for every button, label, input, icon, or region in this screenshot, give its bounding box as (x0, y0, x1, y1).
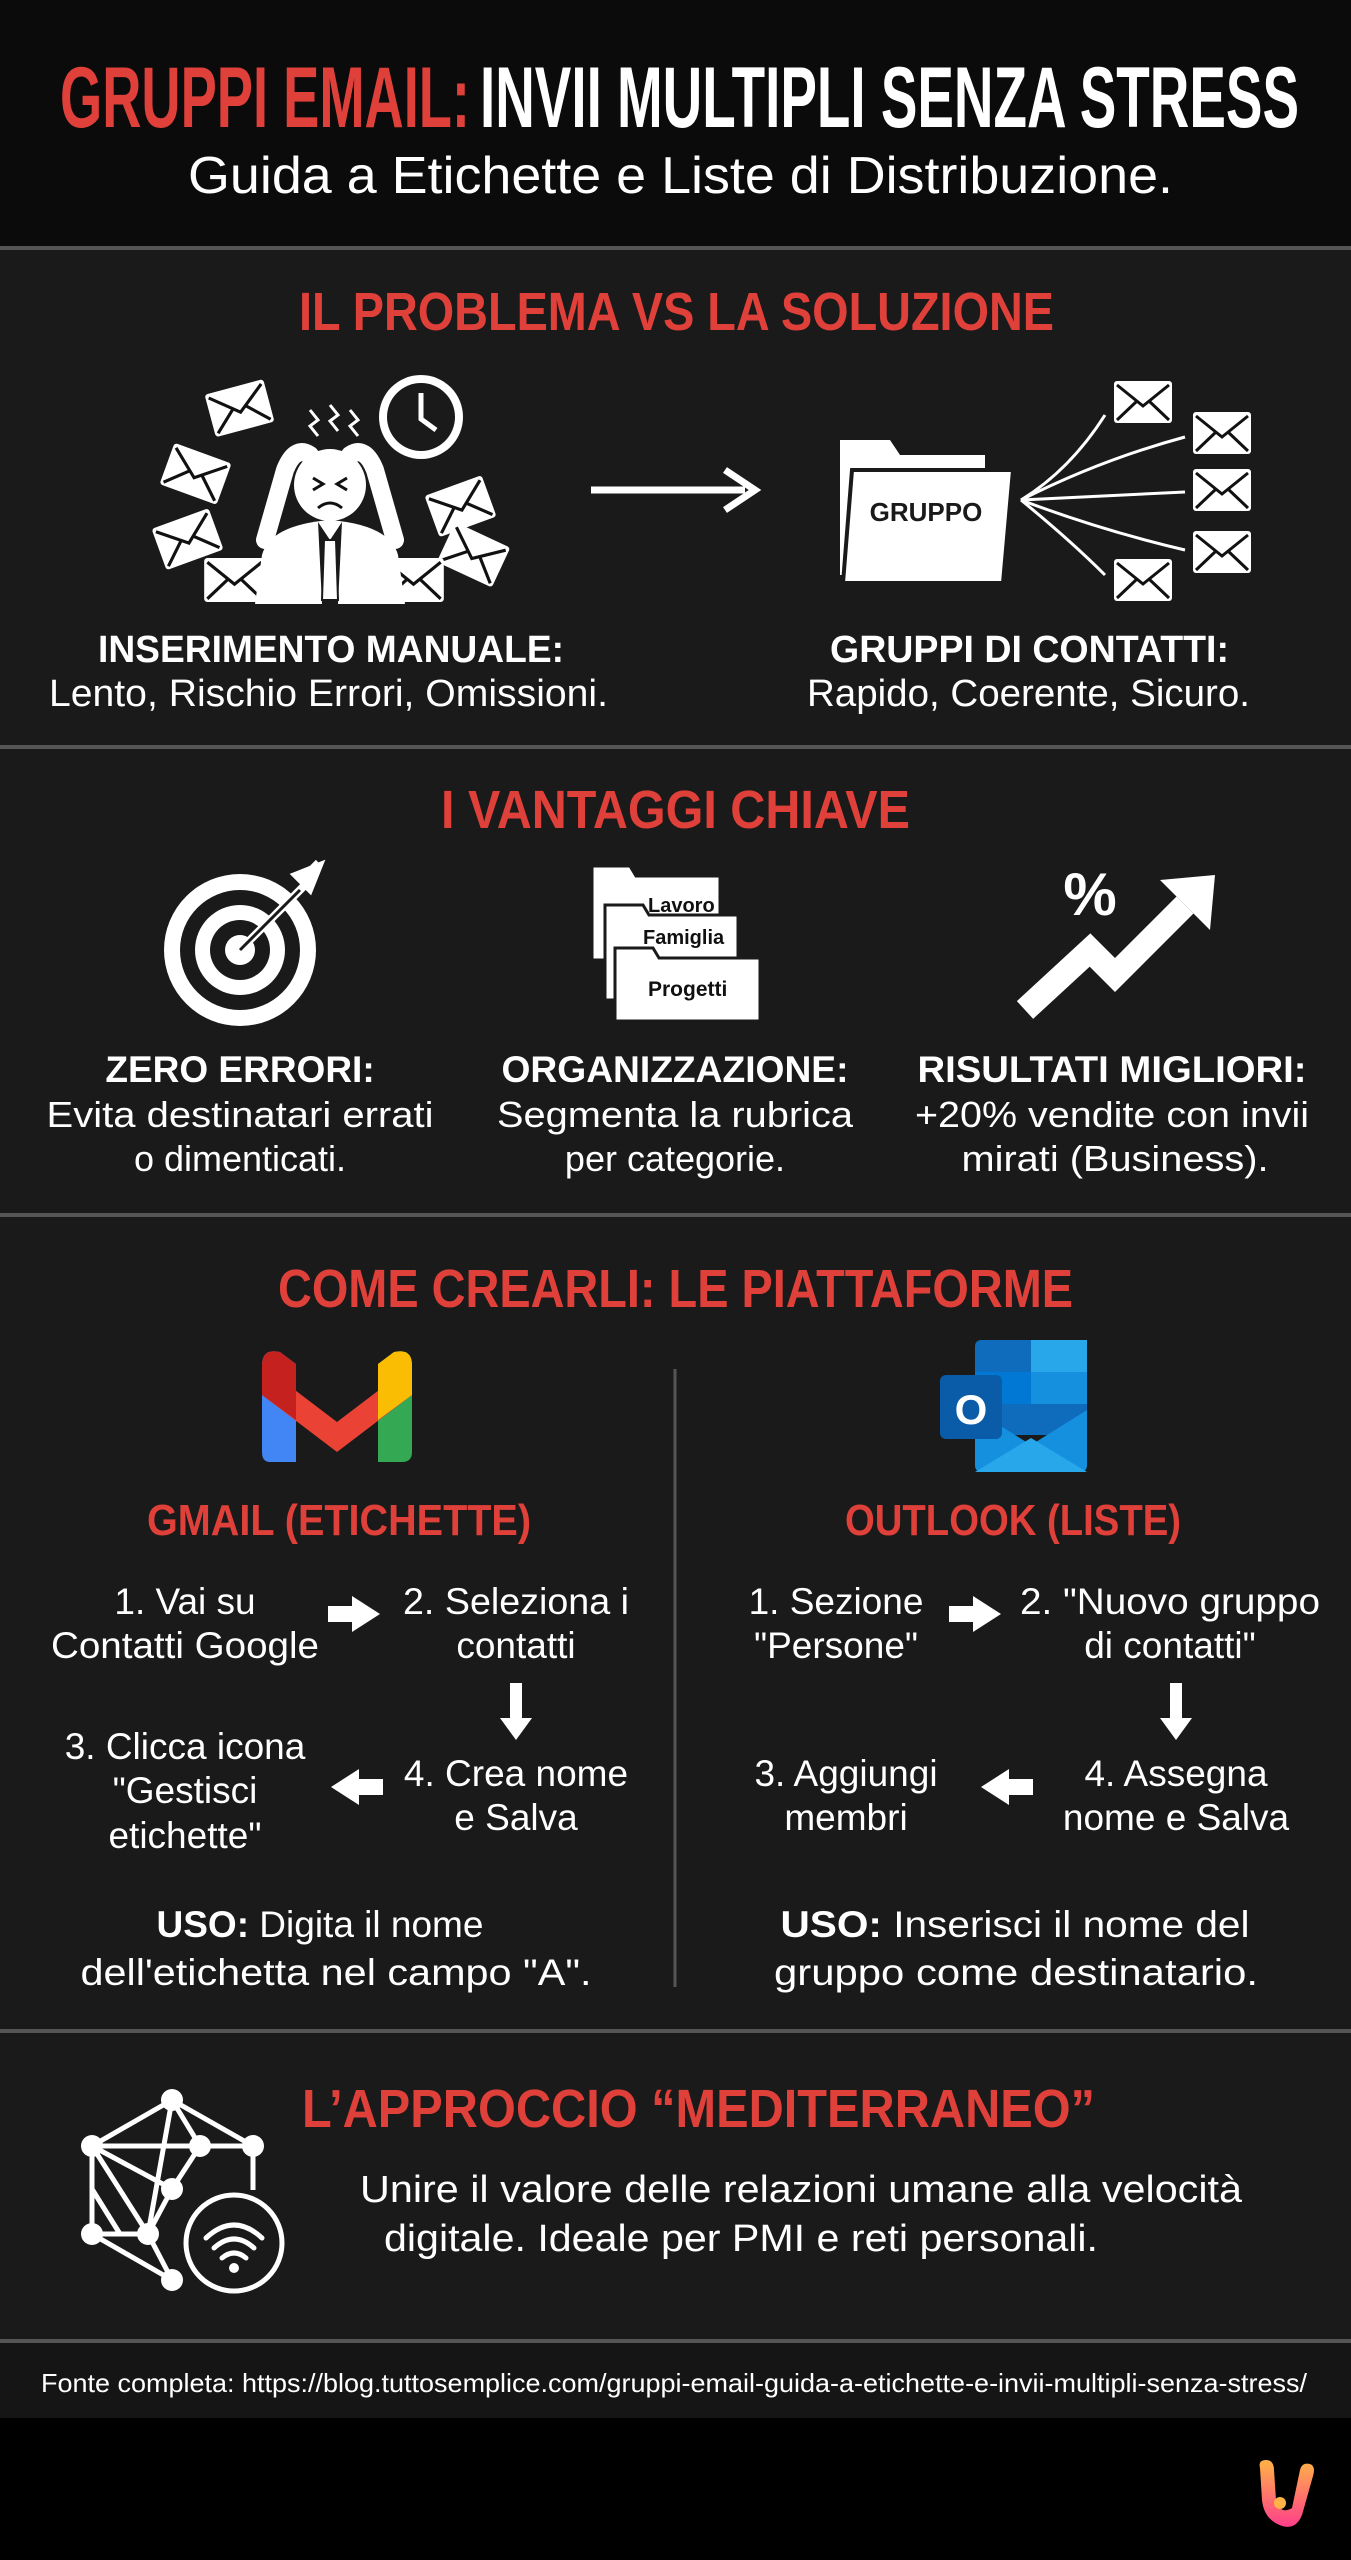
outlook steps: 4. Assegna (1084, 1753, 1268, 1794)
panel: platforms (51, 1259, 1320, 1993)
arrow: problem to solution (591, 470, 755, 510)
heading: platforms: COME CREARLI: LE PIATTAFORME (278, 1259, 1073, 1319)
title: GRUPPI EMAIL: (60, 50, 470, 146)
outlook steps: nome e Salva (1063, 1797, 1290, 1838)
gmail steps: 3. Clicca icona (65, 1726, 306, 1767)
subheading: gmail: GMAIL (ETICHETTE) (147, 1496, 531, 1545)
text: contact groups (807, 629, 1250, 715)
usage: outlook: USO: Inserisci il nome del (780, 1904, 1250, 1945)
gmail steps: Contatti Google (51, 1625, 319, 1666)
text: mediterranean description: digitale. Ideale per PMI e reti personali. (384, 2218, 1098, 2260)
text: mediterranean description: Unire il valore delle relazioni umane alla velocità (360, 2169, 1243, 2211)
icon: network with wifi (81, 2089, 282, 2291)
icon: folders stack: Progetti (648, 978, 727, 1001)
icon: folder GRUPPO with fan-out (840, 381, 1251, 601)
text: mediterranean description (360, 2169, 1243, 2260)
outlook steps: 2. "Nuovo gruppo (1020, 1581, 1320, 1622)
panel: problem vs solution (49, 282, 1251, 715)
outlook steps: di contatti" (1084, 1625, 1256, 1666)
arrows: outlook flow (949, 1596, 1192, 1805)
text: organization: Segmenta la rubrica (497, 1094, 854, 1135)
icon: folders stack: Famiglia (643, 927, 725, 949)
text: manual entry (49, 629, 608, 715)
text: zero errors: ZERO ERRORI: (105, 1049, 375, 1090)
panel: mediterranean approach (81, 2079, 1243, 2291)
heading: key advantages: I VANTAGGI CHIAVE (441, 780, 910, 840)
text: zero errors (46, 1049, 434, 1179)
subheading: outlook: OUTLOOK (LISTE) (845, 1496, 1181, 1545)
arrows: gmail flow (328, 1596, 532, 1805)
text: zero errors: Evita destinatari errati (46, 1094, 434, 1135)
outlook steps: 3. Aggiungi (754, 1753, 938, 1794)
gmail steps: 1. Vai su (114, 1581, 256, 1622)
icon: outlook logo: O (955, 1386, 987, 1433)
usage: outlook: gruppo come destinatario. (774, 1952, 1258, 1993)
outlook steps: membri (784, 1797, 908, 1838)
icon: outlook logo (940, 1340, 1087, 1472)
gmail steps: contatti (456, 1625, 576, 1666)
text: contact groups: Rapido, Coerente, Sicuro. (807, 673, 1250, 715)
icon: stressed man with emails (152, 375, 510, 604)
text: organization: ORGANIZZAZIONE: (502, 1049, 848, 1090)
text: better results: +20% vendite con invii (915, 1094, 1309, 1135)
outlook steps: 1. Sezione (749, 1581, 923, 1622)
panel: key advantages (46, 780, 1309, 1179)
heading: mediterranean approach: L’APPROCCIO “MEDITERRANEO” (302, 2079, 1095, 2139)
heading: problem vs solution: IL PROBLEMA VS LA SOLUZIONE (299, 282, 1054, 342)
text: organization: per categorie. (565, 1138, 785, 1179)
subtitle: Guida a Etichette e Liste di Distribuzione. (188, 147, 1173, 205)
usage: gmail: USO: Digita il nome (157, 1904, 483, 1945)
icon: folders stack (592, 866, 760, 1021)
text: better results: mirati (Business). (962, 1138, 1268, 1179)
gmail steps: e Salva (454, 1797, 578, 1838)
gmail steps: 4. Crea nome (404, 1753, 628, 1794)
icon: folders stack: Lavoro (648, 895, 715, 917)
usage: outlook (774, 1904, 1258, 1993)
text: contact groups: GRUPPI DI CONTATTI: (830, 629, 1229, 671)
text: better results: RISULTATI MIGLIORI: (918, 1049, 1306, 1090)
icon: growth chart (1025, 861, 1215, 1010)
footer: source: Fonte completa: https://blog.tuttosemplice.com/gruppi-email-guida-a-etichette-e-invii-multipli-senza-stress/ (41, 2368, 1308, 2398)
outlook steps (749, 1581, 1320, 1838)
text: manual entry: Lento, Rischio Errori, Omissioni. (49, 673, 608, 715)
gmail steps: 2. Seleziona i (403, 1581, 629, 1622)
icon: target (164, 862, 320, 1026)
outlook steps: "Persone" (754, 1625, 918, 1666)
title (60, 50, 1299, 146)
icon: growth chart: % (1063, 861, 1117, 928)
icon: folder GRUPPO with fan-out: GRUPPO (870, 497, 982, 527)
text: organization (497, 1049, 854, 1179)
text: better results (915, 1049, 1309, 1179)
icon: gmail logo (262, 1351, 412, 1462)
gmail steps: etichette" (108, 1815, 262, 1856)
text: zero errors: o dimenticati. (134, 1138, 346, 1179)
gmail steps (51, 1581, 629, 1856)
icon: brand logo (1260, 2460, 1314, 2527)
gmail steps: "Gestisci (113, 1770, 257, 1811)
usage: gmail (80, 1904, 592, 1993)
usage: gmail: dell'etichetta nel campo "A". (80, 1952, 592, 1993)
text: manual entry: INSERIMENTO MANUALE: (98, 629, 564, 671)
